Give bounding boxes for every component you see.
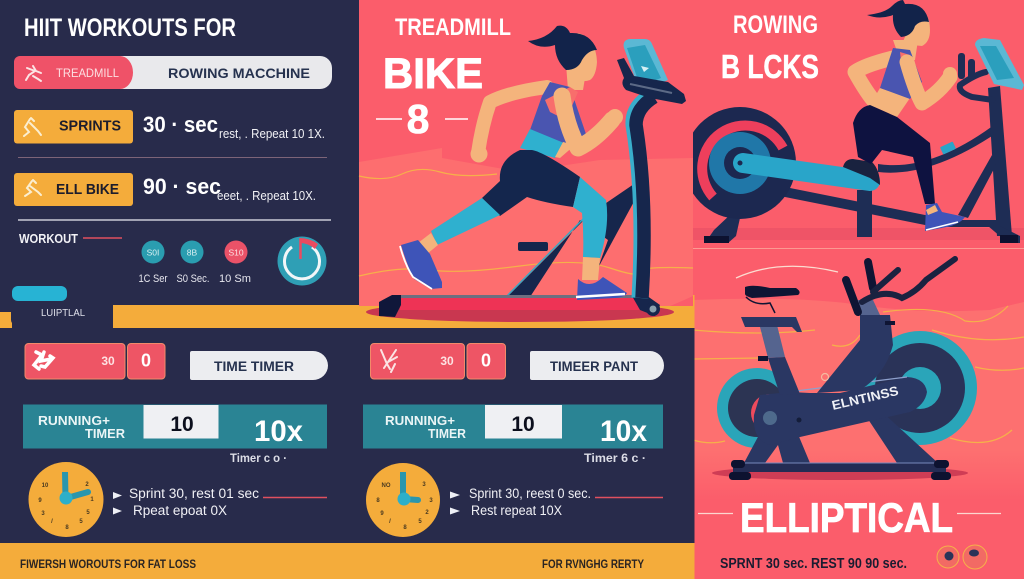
running timer bar (23, 404, 327, 448)
clock: 2 (85, 482, 89, 488)
clock: 8 (403, 525, 407, 531)
clock: 1 (90, 497, 94, 503)
panel: timer left (0, 328, 347, 543)
clock: / (389, 519, 391, 525)
clock: 8 (65, 525, 69, 531)
interval counter: 0 (141, 350, 151, 370)
treadmill heading: TREADMILL (395, 14, 511, 41)
row: elliptical bike (14, 173, 316, 206)
row: sprints: rest, . Repeat 10 1X. (219, 126, 325, 141)
running timer bar: 10 (170, 413, 194, 436)
runner figure (400, 26, 627, 300)
interval counter: 0 (481, 350, 491, 370)
elliptical heading: ELLIPTICAL (740, 494, 953, 541)
rowing heading: B LCKS (721, 48, 819, 85)
timer pill: TIMEER PANT (550, 359, 639, 374)
rowing figure (853, 0, 965, 231)
interval badges: 10 Sm (219, 273, 251, 285)
interval badges: S0I (147, 248, 159, 258)
interval counter: 30 (101, 354, 115, 368)
interval counter (25, 344, 165, 379)
timer pill (190, 351, 328, 380)
running timer bar: TIMER (85, 426, 126, 441)
clock: 5 (79, 519, 83, 525)
panel: exercise bike illustration (693, 249, 1024, 579)
footer text right: FOR RVNGHG RERTY (542, 557, 644, 571)
footer band (0, 543, 693, 579)
clock: 3 (41, 511, 45, 517)
panel: workouts overview (0, 0, 359, 328)
panel: rowing illustration (684, 0, 1024, 248)
clock: 3 (422, 482, 426, 488)
clock (366, 463, 440, 537)
icon: timers badge (937, 545, 987, 569)
elliptical caption: SPRNT 30 sec. REST 90 90 sec. (720, 555, 907, 572)
interval badges (138, 240, 251, 285)
interval badges: S0 Sec. (176, 273, 210, 285)
treadmill heading (376, 14, 511, 142)
clock: 9 (380, 511, 384, 517)
clock: 10 (42, 483, 49, 489)
clock: 5 (86, 510, 90, 516)
workout notes (113, 486, 327, 518)
clock: 9 (38, 498, 42, 504)
running timer bar: RUNNING+ (38, 413, 110, 428)
row: sprints: SPRINTS (59, 118, 121, 134)
panel: treadmill illustration (359, 0, 693, 328)
timer note: Timer c o · (230, 451, 287, 465)
row: sprints: 30 · sec (143, 112, 218, 137)
row: elliptical bike: eeet, . Repeat 10X. (217, 188, 316, 203)
clock (28, 462, 104, 537)
interval badges: 1C Ser (138, 273, 168, 285)
elliptical tab (11, 286, 113, 325)
clock: / (51, 519, 53, 525)
interval badges: S10 (228, 248, 244, 258)
row: elliptical bike: ELL BIKE (56, 181, 119, 198)
running timer bar: 10x (254, 415, 303, 448)
workout heading (19, 231, 122, 246)
workout notes: Rpeat epoat 0X (133, 503, 227, 518)
exercise bike (712, 259, 977, 480)
running timer bar (363, 404, 663, 448)
workout notes: Sprint 30, reest 0 sec. (469, 486, 591, 501)
workout notes (450, 486, 663, 518)
treadmill heading: 8 (407, 96, 429, 142)
running timer bar: 10x (600, 415, 647, 448)
panel: timer right (347, 328, 693, 543)
title: HIIT WORKOUTS FOR (24, 14, 236, 42)
clock: 2 (425, 510, 429, 516)
running timer bar: 10 (511, 413, 535, 436)
timer note: Timer 6 c · (584, 451, 646, 465)
machine selector pill: TREADMILL (56, 66, 119, 80)
elliptical tab: LUIPTLAL (41, 308, 85, 319)
interval badges: 8B (187, 248, 198, 258)
workout notes: Rest repeat 10X (471, 503, 562, 518)
timer pill: TIME TIMER (214, 359, 294, 374)
row: elliptical bike: 90 · sec (143, 174, 221, 199)
row: sprints (14, 110, 325, 144)
treadmill heading: BIKE (383, 50, 483, 98)
interval counter: 30 (440, 354, 454, 368)
rowing heading (721, 11, 819, 85)
clock: NO (382, 483, 391, 489)
clock: 5 (418, 519, 422, 525)
clock: 3 (429, 498, 433, 504)
workout heading: WORKOUT (19, 231, 78, 246)
rowing machine (684, 38, 1024, 243)
clock: 8 (376, 498, 380, 504)
running timer bar: RUNNING+ (385, 413, 455, 428)
footer text left: FIWERSH WOROUTS FOR FAT LOSS (20, 557, 196, 571)
rowing heading: ROWING (733, 11, 818, 39)
machine selector pill (14, 56, 332, 89)
timer pill (530, 351, 664, 380)
running timer bar: TIMER (428, 426, 467, 441)
bike brand label: ELNTINSS (830, 383, 900, 413)
workout notes: Sprint 30, rest 01 sec (129, 486, 259, 501)
treadmill machine (366, 39, 686, 322)
machine selector pill: ROWING MACCHINE (168, 66, 310, 81)
interval counter (370, 344, 506, 379)
icon: countdown gauge (278, 236, 326, 286)
